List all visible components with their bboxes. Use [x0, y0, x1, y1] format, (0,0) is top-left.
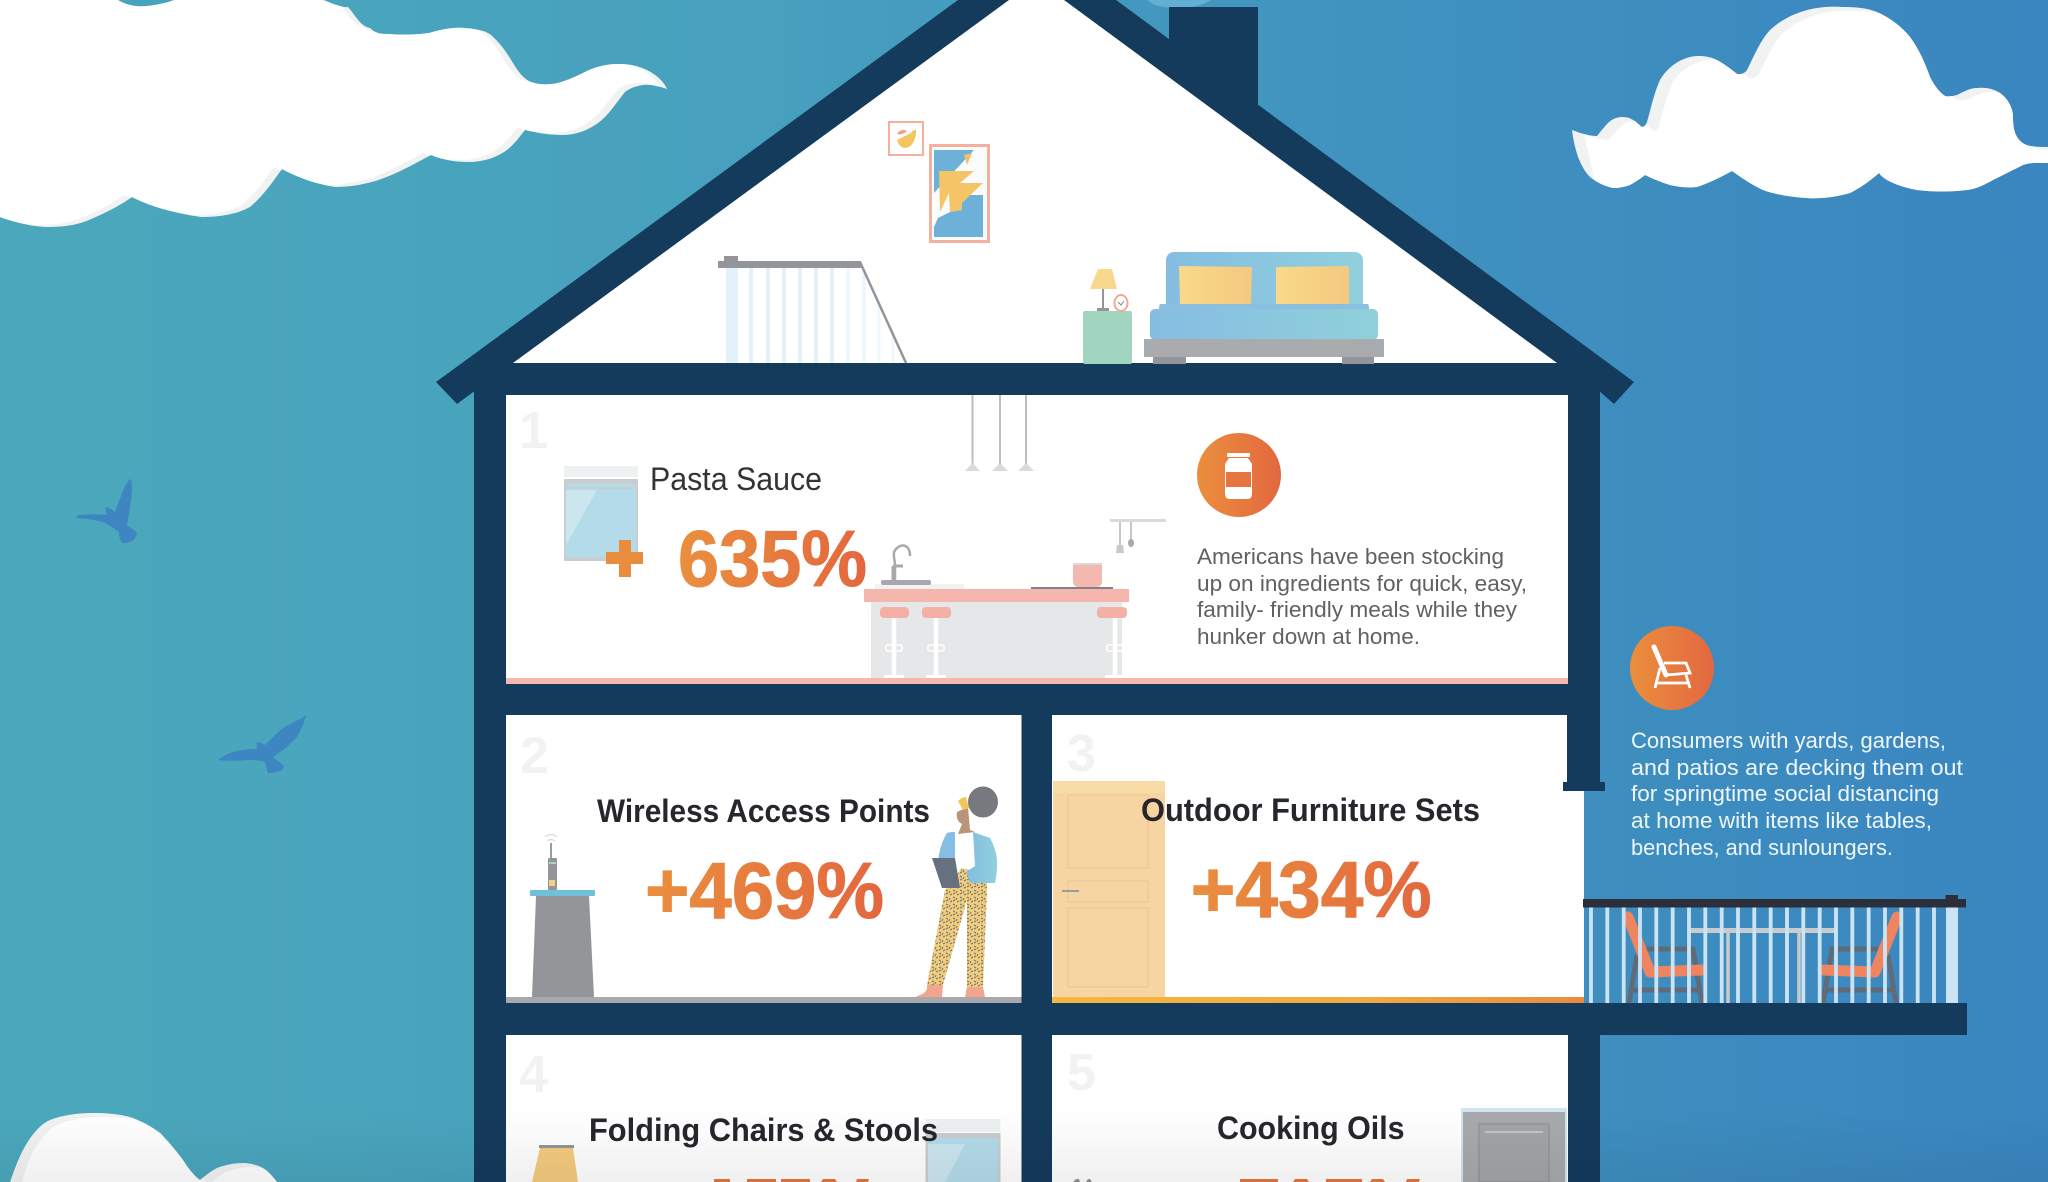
- rank number: 4: [519, 1046, 548, 1104]
- panel 4: folding chairs and stools: [506, 1035, 1022, 1182]
- bottom fade overlay: [0, 1110, 2048, 1182]
- table: [1690, 928, 1835, 1003]
- cloud: bottom left: [10, 1113, 277, 1182]
- attic room: [718, 122, 1384, 364]
- house walls: [474, 380, 1967, 1182]
- door: [1461, 1108, 1567, 1182]
- outdoor description: for springtime social distancing: [1631, 781, 1939, 806]
- small item at floor of frame: [1073, 1179, 1092, 1182]
- railing balusters: [1591, 907, 1934, 1003]
- icon: outdoor chair: [1630, 626, 1714, 710]
- plus sign: [606, 540, 643, 577]
- outdoor description: and patios are decking them out: [1631, 755, 1963, 780]
- door handle: [1062, 890, 1079, 892]
- railing post: [1946, 907, 1958, 1003]
- heading: Pasta Sauce: [650, 461, 822, 497]
- kitchen island: [864, 545, 1129, 678]
- utensil rack: [1110, 519, 1166, 553]
- description: [1197, 544, 1527, 649]
- bird: lower: [218, 715, 306, 773]
- clock: [1114, 295, 1128, 311]
- heading: Cooking Oils: [1217, 1110, 1405, 1146]
- description: family- friendly meals while they: [1197, 597, 1517, 622]
- chimney: [1169, 7, 1258, 115]
- panel 1: pasta sauce: [506, 395, 1568, 684]
- heading: Outdoor Furniture Sets: [1141, 792, 1480, 828]
- rank number: 2: [520, 727, 549, 785]
- outdoor description: [1631, 728, 1963, 860]
- heading: Wireless Access Points: [597, 793, 930, 829]
- house structure: [436, 0, 1967, 1182]
- small picture: [889, 122, 923, 155]
- outdoor description: at home with items like tables,: [1631, 808, 1932, 833]
- outdoor description: Consumers with yards, gardens,: [1631, 728, 1946, 753]
- outdoor description: benches, and sunloungers.: [1631, 835, 1893, 860]
- chair right: [1823, 917, 1897, 1003]
- statistic: +469%: [645, 846, 884, 935]
- wall end cap: [1563, 782, 1605, 791]
- panel 3: outdoor furniture sets: [1052, 715, 1584, 1003]
- large picture: [930, 146, 988, 242]
- roof: [436, 0, 1634, 404]
- lamp: [532, 1145, 578, 1182]
- person: [915, 786, 998, 997]
- rank number: 3: [1067, 725, 1096, 783]
- rank number: 5: [1067, 1044, 1096, 1102]
- pendant lights: [965, 395, 1034, 471]
- statistic: +434%: [1191, 845, 1432, 934]
- floor strip: [506, 997, 1022, 1003]
- railing top: [1583, 895, 1966, 908]
- cloud: top left: [0, 0, 680, 230]
- description: Americans have been stocking: [1197, 544, 1504, 569]
- statistic tops cut off by the frame: [1240, 1179, 1420, 1182]
- bed: [1144, 252, 1384, 364]
- cloud: top right: [1572, 6, 2048, 198]
- heading: Folding Chairs & Stools: [589, 1112, 938, 1148]
- nightstand: [1083, 311, 1132, 364]
- panel 5: cooking oils: [1052, 1035, 1568, 1182]
- floor strip: [506, 678, 1568, 684]
- panel 2: wireless access points: [506, 715, 1022, 1003]
- description: up on ingredients for quick, easy,: [1197, 571, 1527, 596]
- rank number: 1: [519, 402, 548, 460]
- door: [1053, 781, 1165, 997]
- window: [564, 466, 638, 561]
- window: [926, 1119, 1000, 1182]
- statistic: 635%: [678, 514, 867, 603]
- router stand: [530, 834, 595, 997]
- curtain: [718, 256, 906, 363]
- description: hunker down at home.: [1197, 624, 1420, 649]
- bird: upper: [75, 479, 137, 543]
- lamp: [1090, 269, 1117, 311]
- attic interior: [513, 0, 1557, 363]
- floor strip: [1052, 997, 1584, 1003]
- balcony: [1583, 895, 1966, 1003]
- cloud: behind chimney: [1147, 0, 1211, 8]
- icon: jar: [1197, 433, 1281, 517]
- chair left: [1628, 917, 1702, 1003]
- statistic tops cut off by the frame: [714, 1179, 869, 1182]
